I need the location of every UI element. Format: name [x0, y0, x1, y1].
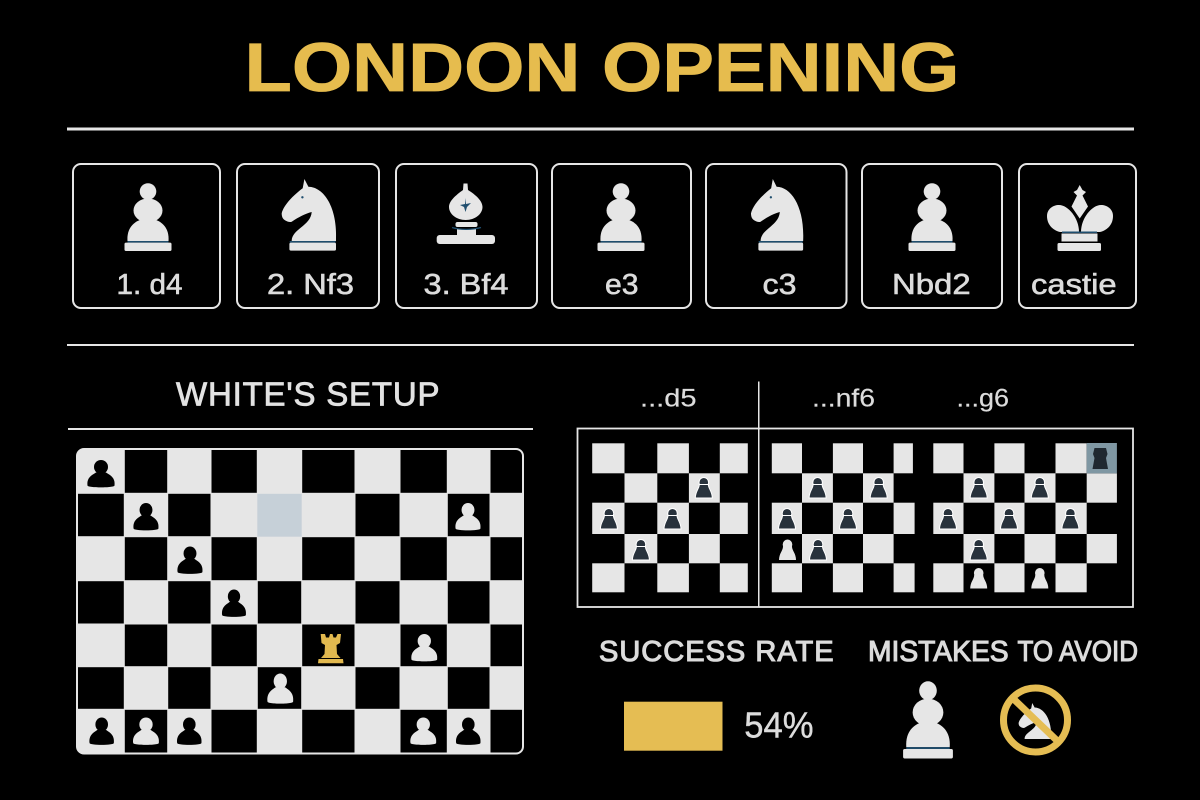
variation labels — [640, 384, 1009, 412]
move card: e3: e3 — [605, 269, 638, 301]
move card: 1. d4: 1. d4 — [116, 269, 182, 301]
move card: castle: castie — [1031, 269, 1117, 301]
heading: white's setup: WHITE'S SETUP — [176, 376, 440, 412]
title: LONDON OPENING — [244, 29, 960, 106]
variation labels: ...g6 — [956, 384, 1009, 412]
move card: Nbd2: Nbd2 — [892, 269, 971, 301]
move card: c3 — [706, 164, 846, 308]
move card: 3. Bf4: 3. Bf4 — [424, 269, 508, 301]
chess board: white's setup — [77, 449, 523, 754]
move card: 2. Nf3 — [237, 164, 379, 308]
pieces: white pawns — [133, 503, 481, 745]
board: nf6 variation — [772, 443, 915, 592]
icon: prohibited knight — [1004, 688, 1068, 752]
panel: move sequence — [73, 164, 1136, 308]
variation labels: ...d5 — [640, 384, 696, 412]
move card: 2. Nf3: 2. Nf3 — [267, 269, 354, 301]
heading: mistakes to avoid: MISTAKES — [868, 636, 1009, 668]
move card: e3 — [552, 164, 691, 308]
move card: 3. Bf4 — [396, 164, 537, 308]
move card: Nbd2 — [862, 164, 1002, 308]
move card: castle — [1019, 164, 1136, 308]
success rate bar — [624, 702, 722, 751]
heading: mistakes to avoid — [868, 636, 1138, 668]
variation labels: ...nf6 — [812, 384, 875, 412]
panel: variation boards — [578, 382, 1133, 607]
piece: gold rook — [318, 634, 344, 663]
success rate value: 54% — [744, 705, 814, 746]
board: d5 variation — [592, 443, 748, 592]
board: g6 variation — [933, 443, 1117, 592]
move card: c3: c3 — [762, 269, 796, 301]
icon: pawn — [903, 681, 953, 759]
highlighted square — [257, 494, 302, 537]
pieces: black pawns — [87, 460, 481, 745]
heading: mistakes to avoid: TO AVOID — [1018, 636, 1138, 668]
heading: success rate: SUCCESS RATE — [599, 636, 834, 668]
move card: 1. d4 — [73, 164, 220, 308]
